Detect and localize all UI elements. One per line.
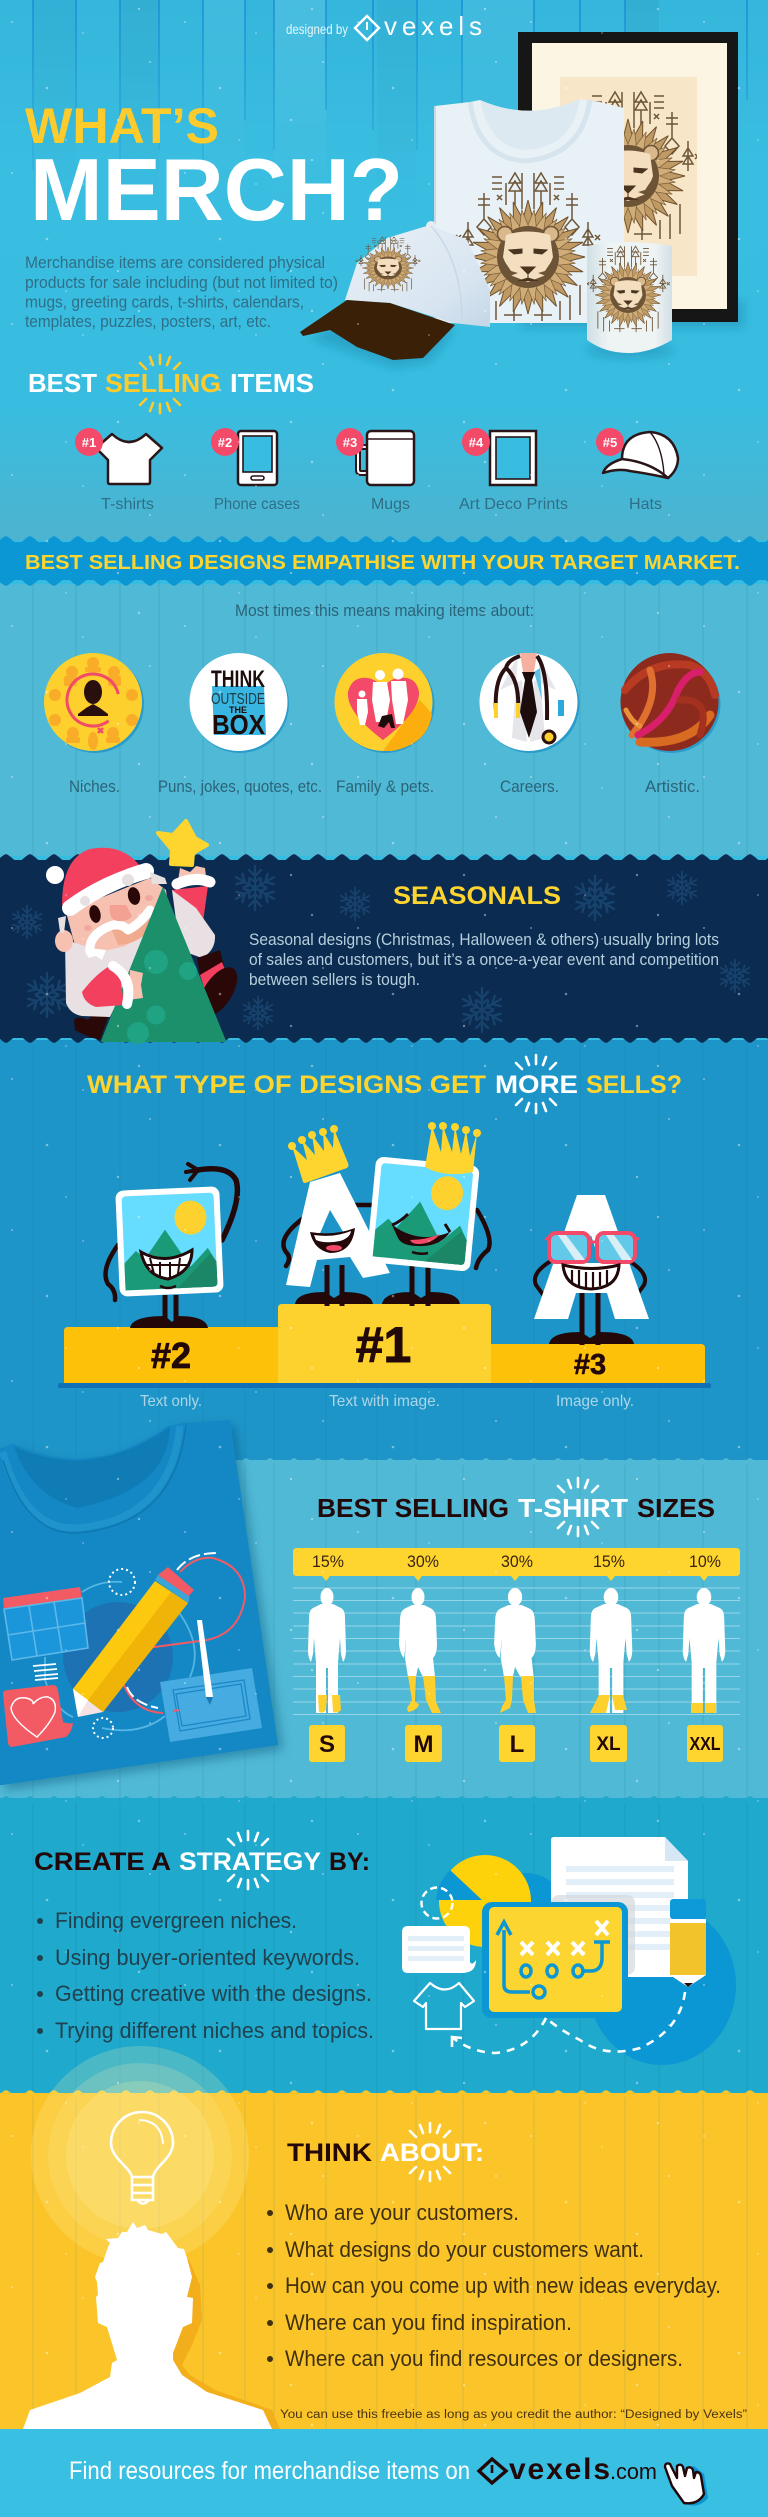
podium labels [140,1393,634,1410]
heading: what type of designs [87,1055,682,1113]
item: phone cases: #2 [218,435,232,450]
podium labels: Image only. [556,1393,634,1410]
large blue t-shirt [0,1420,283,1790]
heading: what type of designs: MORE [495,1071,578,1099]
size M: M [414,1731,434,1758]
percent bar: 30% [501,1552,533,1571]
category: artistic [620,653,720,796]
size S [308,1588,346,1762]
credit note: You can use this freebie as long as you credit the author: “Designed by Vexels” [280,2409,747,2421]
heading: create a strategy: STRATEGY [179,1848,321,1876]
body right side [172,890,215,958]
list: think about: Where can you find resources or designers. [285,2346,683,2371]
percent bar: 15% [312,1552,344,1571]
item: art deco prints [459,428,568,513]
background: top section [0,0,768,540]
vexels logo [479,2453,657,2486]
framed print [518,32,738,322]
heading: best selling items: ITEMS [230,368,314,398]
shirt shadow [5,1425,283,1790]
title: WHAT’S [25,98,219,154]
category: puns: BOX [212,709,265,740]
category: niches [44,653,144,796]
crown left [288,1125,348,1183]
chart: t-shirt size percentages [293,1548,740,1762]
intro paragraph: templates, puzzles, posters, art, etc. [25,312,271,331]
category: puns: THINK [211,666,265,693]
heading: think about: ABOUT: [380,2139,484,2167]
vexels credit top [286,11,482,41]
heading: think about [287,2123,484,2181]
heading: what type of designs: SELLS? [586,1071,682,1099]
percent bar: 15% [593,1552,625,1571]
list: strategy: Getting creative with the designs. [55,1981,372,2006]
shirt body [0,1420,278,1785]
list: think about [267,2200,721,2371]
paragraph: of sales and customers, but it’s a once-a-year event and competition [249,950,719,969]
shadows [310,300,744,368]
size XL [590,1588,632,1762]
grid lines [293,1588,740,1714]
pie chart [422,1855,531,1947]
stylus [197,1620,213,1705]
heading: create a strategy: BY: [329,1848,370,1876]
intro paragraph [25,253,338,331]
character: letter A number 3 [534,1195,649,1345]
paragraph: Seasonal designs (Christmas, Halloween & others) usually bring lots [249,930,719,949]
best selling items icons [75,428,678,513]
footer call to action [69,2453,708,2506]
banner: best selling designs [0,536,768,586]
face [66,878,170,952]
t-shirt outline [414,1983,474,2029]
t-shirt [435,99,624,323]
heading: t-shirt sizes: T-SHIRT [518,1493,628,1523]
place 1: #1 [356,1317,411,1373]
item: hats: Hats [629,496,662,513]
list: strategy: Using buyer-oriented keywords. [55,1945,360,1970]
podium [58,1304,711,1388]
size M [399,1588,442,1762]
icon: pointing hand [665,2463,708,2506]
percent bar: 30% [407,1552,439,1571]
item: t-shirts: #1 [82,435,96,450]
paragraph: between sellers is tough. [249,970,420,989]
item: mugs: Mugs [371,496,410,513]
podium labels: Text only. [140,1393,202,1410]
intro paragraph: Merchandise items are considered physical [25,253,325,272]
item: t-shirts: T-shirts [101,496,154,513]
category: careers: Careers. [500,777,559,796]
speech bubble [402,1926,476,1973]
character: letter A number 1 [283,1125,390,1306]
category: puns: THE [229,705,247,715]
size S: S [319,1731,335,1758]
illustration: strategy [402,1837,736,2065]
heading: what type of designs: WHAT TYPE OF DESIGNS GET [87,1071,486,1099]
category: puns: OUTSIDE [211,691,265,708]
hero merchandise mockups [300,32,744,368]
category: family and pets: Family & pets. [336,777,434,796]
wood grain overlay [0,540,768,2429]
vexels credit top: designed by [286,21,348,37]
title: MERCH? [30,140,403,239]
percent bar [293,1548,740,1581]
background: footer section [0,2429,768,2517]
place 1 [278,1304,491,1383]
paragraph [249,930,719,989]
footer call to action: Find resources for merchandise items on [69,2457,470,2485]
character: image number 1 [366,1122,490,1306]
intro paragraph: mugs, greeting cards, t-shirts, calendars, [25,292,304,312]
dark circle [63,1602,173,1712]
heart bubble [3,1685,73,1747]
text: most times: Most times this means making items about: [235,601,534,620]
category: puns: Puns, jokes, quotes, etc. [158,777,322,796]
percent bar: 10% [689,1552,721,1571]
intro paragraph: products for sale including (but not limited to) [25,273,338,292]
list: think about: Where can you find inspiration. [285,2310,572,2335]
heading: create a strategy: CREATE A [34,1848,171,1876]
crown right [425,1122,481,1174]
list: strategy: Trying different niches and topics. [55,2018,374,2043]
vexels logo: vexels [509,2453,610,2486]
raised hand and sleeve [172,866,210,922]
category: careers [480,653,580,796]
vexels logo: .com [610,2459,657,2484]
silhouette shadow [172,2250,280,2429]
glow behind lightbulb [31,2046,249,2264]
heading: create a strategy [34,1831,370,1889]
item: mugs: #3 [343,435,357,450]
cap [300,221,490,360]
design categories [44,653,720,796]
document [551,1837,688,1977]
calendar [3,1587,88,1660]
heading: best selling items: BEST [28,368,97,398]
list: strategy [37,1908,374,2043]
background: empathise section [0,584,768,856]
item: phone cases [211,428,300,513]
boots [74,950,245,1040]
heading: t-shirt sizes: BEST SELLING [317,1493,509,1523]
item: mugs [336,428,414,513]
vexels credit top: vexels [384,11,482,41]
size XXL [683,1588,725,1762]
dashed arrows [452,1992,685,2053]
lines [33,1664,58,1680]
heading: t-shirt sizes: SIZES [637,1493,715,1523]
category: family and pets [334,653,434,796]
playbook card [482,1902,628,2018]
heading: t-shirt sizes [317,1478,715,1536]
connectors [45,1582,195,1730]
heading: best selling items: SELLING [105,368,221,398]
size L: L [510,1731,524,1758]
item: hats [596,428,678,513]
place 3 [491,1344,705,1383]
category: artistic: Artistic. [645,777,700,796]
person silhouette with lightbulb [23,2112,280,2429]
size XXL: XXL [690,1734,720,1754]
red curve [122,1558,245,1713]
illustration: santa with tree [46,821,245,1044]
item: t-shirts [75,428,162,513]
lightbulb [111,2112,173,2204]
silhouette [23,2222,272,2429]
list: strategy: Finding evergreen niches. [55,1908,297,1933]
eyes and features [84,886,153,960]
banner: best selling designs: BEST SELLING DESIGNS EMPATHISE WITH YOUR TARGET MARKET. [25,552,740,574]
list: think about: How can you come up with new ideas everyday. [285,2273,721,2298]
scallop edges [0,1458,768,2097]
hat [46,848,167,933]
pencil [670,1899,706,1987]
item: phone cases: Phone cases [214,496,300,513]
heading: SEASONALS [393,882,561,910]
tablet [160,1668,262,1742]
snowflakes [10,866,752,1032]
star [158,821,207,865]
category: puns [158,653,322,796]
item: hats: #5 [603,435,617,450]
category: niches: Niches. [69,777,120,796]
place 3: #3 [574,1349,606,1381]
size L [494,1588,536,1762]
background: t-shirt sizes section [0,1460,768,1798]
glove [82,966,143,1007]
beard [65,930,150,1017]
list: think about: Who are your customers. [285,2200,519,2225]
panel: seasonals [0,854,768,1043]
list: think about: What designs do your customers want. [285,2237,644,2262]
size XL: XL [596,1734,621,1755]
item: art deco prints: Art Deco Prints [459,496,568,513]
place 2: #2 [151,1335,191,1376]
background: think about section [0,2093,768,2429]
tree [102,889,225,1044]
podium labels: Text with image. [329,1393,440,1410]
title [25,98,403,239]
item: art deco prints: #4 [469,435,484,450]
heading: best selling items [28,355,314,413]
mug [586,242,672,353]
heading: think about: THINK [287,2139,372,2167]
character: image number 2 [106,1164,237,1328]
background: type of designs section [0,1040,768,1460]
background: strategy section [0,1798,768,2093]
place 2 [64,1327,278,1383]
pencil [73,1567,194,1717]
